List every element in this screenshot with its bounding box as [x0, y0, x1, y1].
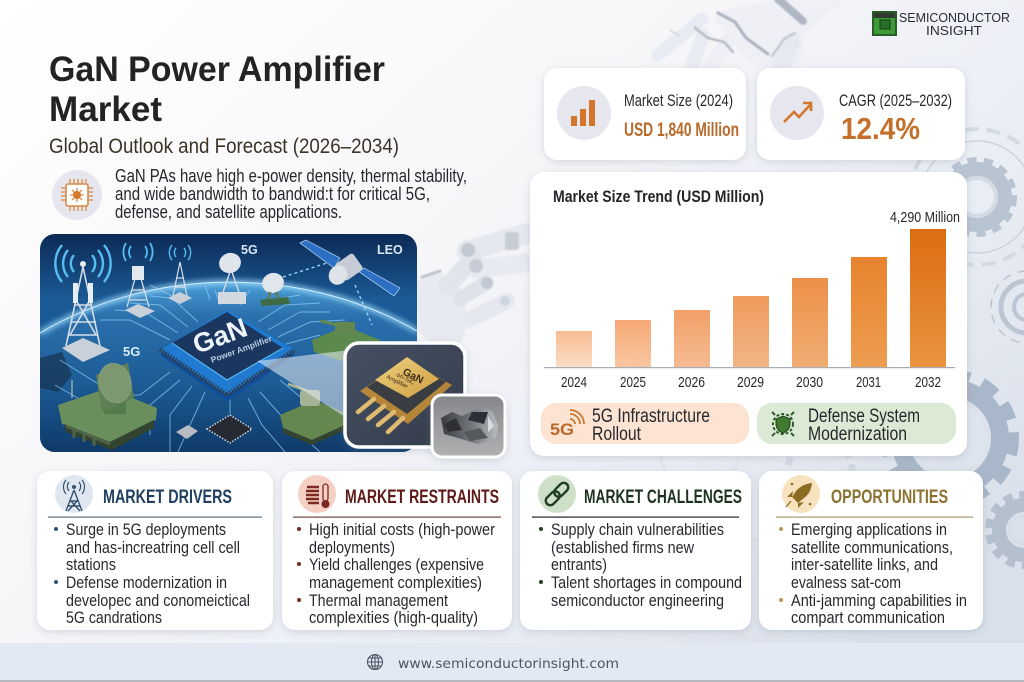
- satellite dishes: [216, 250, 372, 325]
- label: 5G left: 5G: [123, 344, 140, 359]
- spotlight beam: [257, 350, 344, 416]
- bullet list: 5G candrations: [66, 609, 162, 627]
- bar chart: 2029: [737, 375, 764, 391]
- bullet list: Supply chain vulnerabilities: [551, 521, 724, 539]
- card: CAGR: [757, 68, 965, 160]
- description text: and wide bandwidth to bandwid:t for critical 5G,: [115, 184, 430, 204]
- title: GaN Power Amplifier: [49, 49, 385, 89]
- bullet list: [54, 521, 250, 627]
- logo text: [899, 10, 1010, 38]
- inset: GaN packaged chip: Amplifier: [385, 374, 409, 390]
- bullet list: [779, 521, 967, 627]
- circuit traces: [55, 285, 345, 452]
- small chips: [176, 415, 252, 443]
- icon: shield: [772, 412, 794, 436]
- logo: [872, 10, 1010, 38]
- panel: market size trend: [530, 172, 967, 456]
- title: [49, 49, 385, 129]
- icon: trend arrow: [770, 86, 824, 140]
- bar chart: 2031: [856, 375, 881, 391]
- earth globe: [40, 282, 417, 452]
- bullet list: Emerging applications in: [791, 521, 947, 539]
- icon: globe: [368, 654, 382, 670]
- inset: GaN packaged chip: [345, 343, 465, 447]
- footer bar: [0, 643, 1024, 682]
- value label: 4,290 Million: [890, 209, 960, 226]
- bar chart: 2025: [620, 375, 646, 391]
- icon: logo mark: [872, 11, 897, 36]
- bullet list: and has-increatring cell cell: [66, 539, 240, 557]
- chart title: Market Size Trend (USD Million): [553, 187, 764, 206]
- bullet list: entrants): [551, 556, 607, 574]
- bullet list: inter-satellite links, and: [791, 556, 938, 574]
- title: Market: [49, 89, 162, 129]
- bullet list: Yield challenges (expensive: [309, 556, 484, 574]
- icon: bar chart: [557, 86, 611, 140]
- heading: MARKET DRIVERS: [103, 487, 232, 508]
- bullet list: Surge in 5G deployments: [66, 521, 226, 539]
- pill text: Defense System: [808, 406, 920, 427]
- bullet list: developec and conomeictical: [66, 592, 250, 610]
- label: LEO: LEO: [377, 243, 403, 257]
- icon: antenna: [55, 475, 93, 513]
- panel: market restraints: [282, 471, 512, 630]
- satellite: [300, 240, 400, 296]
- bullet list: Anti-jamming capabilities in: [791, 592, 967, 610]
- CAGR label: CAGR (2025–2032): [839, 91, 952, 110]
- pill text: 5G Infrastructure: [592, 406, 710, 427]
- bullet list: Talent shortages in compound: [551, 574, 742, 592]
- logo text: SEMICONDUCTOR: [899, 10, 1010, 25]
- panel: market drivers: [37, 471, 273, 630]
- pill: defense modernization: [757, 403, 956, 445]
- market size label: Market Size (2024): [624, 91, 733, 110]
- bullet list: Defense modernization in: [66, 574, 227, 592]
- market size value: USD 1,840 Million: [624, 120, 739, 141]
- pill: 5G infrastructure: [541, 403, 749, 445]
- tank bottom right: [280, 384, 350, 445]
- bullet list: satellite communications,: [791, 539, 953, 557]
- inset: GaN packaged chip: GaN: [401, 366, 425, 386]
- GaN power amplifier chip: Power Amplifier: [209, 333, 274, 365]
- robot hand top right: [658, 0, 845, 70]
- icon: 5G signal: 5G: [550, 420, 574, 439]
- bar chart: 2026: [678, 375, 705, 391]
- label: 5G top: 5G: [241, 243, 258, 257]
- bullet list: [539, 521, 742, 610]
- bullet list: deployments): [309, 539, 395, 557]
- hero illustration: GaN network: [40, 234, 417, 452]
- bullet list: management complexities): [309, 574, 482, 592]
- pill text: Rollout: [592, 424, 642, 445]
- heading: MARKET CHALLENGES: [584, 487, 742, 508]
- bar chart: [544, 229, 955, 391]
- panel: opportunities: [759, 471, 983, 630]
- bullet list: High initial costs (high-power: [309, 521, 495, 539]
- icon: cost and thermometer: [298, 475, 336, 513]
- bullet list: stations: [66, 556, 116, 574]
- GaN power amplifier chip: GaN: [189, 312, 251, 360]
- description text: [115, 166, 467, 222]
- icon: rocket: [782, 475, 820, 513]
- panel: market challenges: [520, 471, 751, 630]
- bullet list: [297, 521, 495, 627]
- pill text: Modernization: [808, 424, 907, 445]
- logo text: INSIGHT: [926, 23, 982, 38]
- tank top right: [312, 321, 380, 362]
- icon: chain link: [538, 475, 576, 513]
- GaN power amplifier chip: [160, 310, 295, 402]
- bullet list: (established firms new: [551, 539, 694, 557]
- description text: defense, and satellite applications.: [115, 202, 342, 222]
- icon: chip with sun: [52, 170, 102, 220]
- bullet list: evalness sat-com: [791, 574, 901, 592]
- bullet list: complexities (high-quality): [309, 609, 478, 627]
- background gears: [660, 129, 1024, 640]
- bar chart: 2030: [796, 375, 823, 391]
- icon: 5G signal: [550, 410, 584, 439]
- radar tank: [58, 360, 157, 450]
- pill text: [592, 406, 710, 445]
- heading: OPPORTUNITIES: [831, 487, 948, 508]
- inset: gallium sample: [432, 395, 505, 457]
- cell towers with signal arcs: [55, 243, 192, 362]
- bullet list: semiconductor engineering: [551, 592, 724, 610]
- bar chart: 2032: [915, 375, 941, 391]
- description text: GaN PAs have high e-power density, thermal stability,: [115, 166, 467, 186]
- bullet list: compart communication: [791, 609, 945, 627]
- footer url: www.semiconductorinsight.com: [398, 656, 619, 672]
- bullet list: Thermal management: [309, 592, 448, 610]
- inset: GaN packaged chip: on-SiC: [395, 372, 416, 387]
- CAGR value: 12.4%: [841, 111, 920, 146]
- robot hand middle: [416, 232, 530, 346]
- bar chart: 2024: [561, 375, 587, 391]
- heading: MARKET RESTRAINTS: [345, 487, 499, 508]
- subtitle: Global Outlook and Forecast (2026–2034): [49, 135, 399, 158]
- card: market size: [544, 68, 746, 160]
- pill text: [808, 406, 920, 445]
